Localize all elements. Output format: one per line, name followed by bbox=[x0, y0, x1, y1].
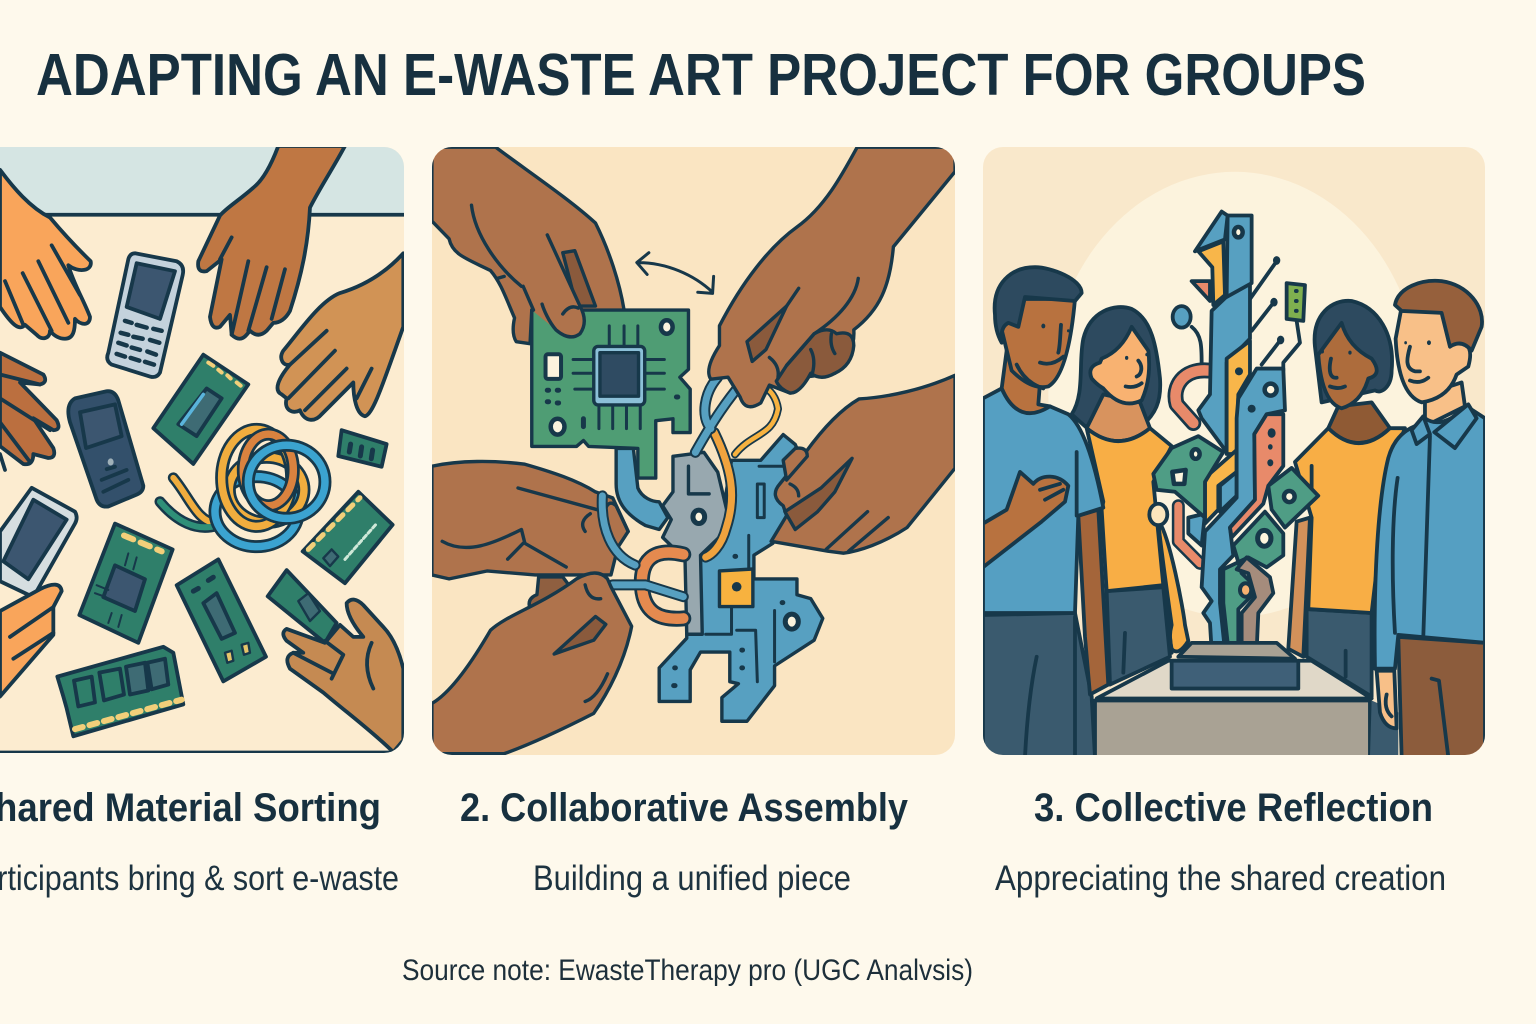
hand: left brown bbox=[0, 353, 59, 470]
connector arm bbox=[616, 448, 668, 529]
circuit board: cpu bbox=[79, 524, 173, 643]
sculpture: blue circuit piece bbox=[659, 435, 823, 721]
hand: top centre brown bbox=[198, 146, 345, 339]
sculpture bbox=[1149, 212, 1318, 653]
source note: Source note: EwasteTherapy pro (UGC Analvsis) bbox=[402, 954, 973, 987]
person: man right bbox=[1370, 281, 1485, 757]
hand: bottom right bbox=[283, 600, 403, 752]
person: man left bbox=[983, 267, 1108, 757]
heading: step 2: 2. Collaborative Assembly bbox=[460, 786, 909, 830]
panel: collaborative assembly bbox=[432, 147, 955, 755]
hand: left upper bbox=[432, 461, 628, 579]
circuit board: right bbox=[303, 492, 393, 583]
hand: top left orange bbox=[0, 170, 91, 339]
circuit board: ram stick bbox=[57, 647, 183, 736]
person: woman right bbox=[1288, 301, 1405, 696]
yellow chip bbox=[719, 569, 753, 607]
panel: collective reflection bbox=[983, 147, 1485, 758]
orange ring bbox=[642, 553, 683, 619]
circuit board: memory module bbox=[177, 559, 266, 681]
wire loop over hand bbox=[602, 496, 635, 565]
hand: right tan bbox=[278, 253, 403, 420]
tangled wires bbox=[160, 429, 325, 547]
arrow: rotate bbox=[637, 253, 714, 293]
hand: top right bbox=[709, 147, 955, 407]
phone: silver keypad bbox=[107, 253, 183, 377]
wires bbox=[613, 373, 778, 597]
caption: step 2: Building a unified piece bbox=[533, 859, 851, 898]
title: ADAPTING AN E-WASTE ART PROJECT FOR GROUPS bbox=[36, 42, 1366, 108]
sculpture: grey piece bbox=[663, 452, 728, 634]
heading: step 3: 3. Collective Reflection bbox=[1034, 786, 1433, 830]
glow behind sculpture bbox=[1048, 172, 1422, 617]
phone: smartphone bbox=[0, 488, 77, 597]
circuit board: held in hand bbox=[268, 570, 337, 643]
hand: right bbox=[771, 375, 955, 553]
caption: step 3: Appreciating the shared creation bbox=[995, 859, 1446, 898]
circuit board: small chip bbox=[338, 430, 387, 467]
circuit board: upper centre bbox=[153, 355, 248, 464]
pedestal and base bbox=[1095, 643, 1372, 758]
panel: shared material sorting bbox=[0, 146, 404, 753]
hand: left lower bbox=[432, 573, 632, 754]
finger on board bbox=[471, 205, 584, 337]
printed circuit board bbox=[532, 310, 690, 478]
hand: top left holding board bbox=[432, 147, 624, 344]
person: woman left bbox=[1072, 307, 1188, 685]
phone: dark handset bbox=[68, 391, 143, 507]
hand: bottom left orange bbox=[0, 585, 62, 696]
